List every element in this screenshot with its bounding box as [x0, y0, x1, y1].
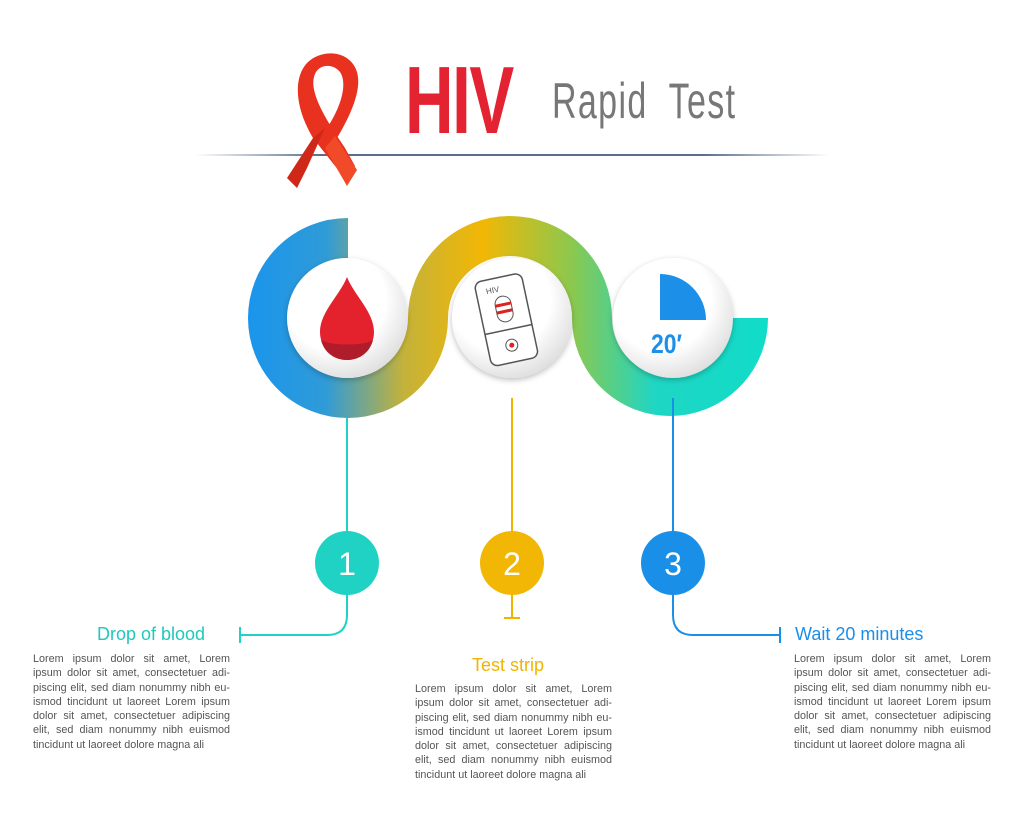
text block 1: dolor sit amet, consectetuer adipiscing — [33, 710, 230, 722]
icon: timer circle 20': 20′ — [651, 329, 682, 359]
step 2 badge: 2 — [503, 546, 521, 582]
text block 1: tincidunt ut laoreet dolore magna ali — [33, 739, 204, 751]
wave band — [268, 236, 748, 398]
text block 2: ismod tincidunt ut laoreet Lorem ipsum — [415, 726, 612, 738]
text block 1: piscing elit, sed diam nonummy nibh eu- — [33, 682, 230, 694]
title: HIV: HIV — [405, 47, 513, 154]
text block 2: tincidunt ut laoreet dolore magna ali — [415, 769, 586, 781]
icon: test strip circle: HIV — [485, 285, 501, 296]
step 1 badge: 1 — [338, 546, 356, 582]
icon: red ribbon — [287, 53, 358, 188]
heading: Test strip: Test strip — [472, 655, 544, 675]
connector 3 — [673, 398, 780, 643]
text block 1: ismod tincidunt ut laoreet Lorem ipsum — [33, 696, 230, 708]
text block 1: Lorem ipsum dolor sit amet, Lorem — [33, 653, 230, 665]
step 3 badge — [641, 531, 705, 595]
connector 2 — [504, 398, 520, 618]
step 1 badge — [315, 531, 379, 595]
connector 1 — [240, 418, 347, 643]
heading: Wait 20 minutes: Wait 20 minutes — [795, 624, 923, 644]
icon: blood drop circle — [287, 258, 407, 378]
icon: timer circle 20' — [613, 258, 733, 378]
step 3 badge: 3 — [664, 546, 682, 582]
text block 1: ipsum dolor sit amet, consectetuer adi- — [33, 667, 230, 679]
text block 2: dolor sit amet, consectetuer adipiscing — [415, 740, 612, 752]
text block 2: ipsum dolor sit amet, consectetuer adi- — [415, 697, 612, 709]
text block 2: elit, sed diam nonummy nibh euismod — [415, 754, 612, 766]
text block 3: tincidunt ut laoreet dolore magna ali — [794, 739, 965, 751]
text block 2: piscing elit, sed diam nonummy nibh eu- — [415, 712, 612, 724]
text block 3: Lorem ipsum dolor sit amet, Lorem — [794, 653, 991, 665]
text block 3: dolor sit amet, consectetuer adipiscing — [794, 710, 991, 722]
text block 3: piscing elit, sed diam nonummy nibh eu- — [794, 682, 991, 694]
text block 1 — [33, 653, 230, 751]
step 2 badge — [480, 531, 544, 595]
text block 3: elit, sed diam nonummy nibh euismod — [794, 724, 991, 736]
text block 3: ismod tincidunt ut laoreet Lorem ipsum — [794, 696, 991, 708]
title underline — [195, 154, 830, 156]
text block 3 — [794, 653, 991, 751]
text block 2 — [415, 683, 612, 781]
text block 1: elit, sed diam nonummy nibh euismod — [33, 724, 230, 736]
heading: Drop of blood: Drop of blood — [97, 624, 205, 644]
text block 3: ipsum dolor sit amet, consectetuer adi- — [794, 667, 991, 679]
text block 2: Lorem ipsum dolor sit amet, Lorem — [415, 683, 612, 695]
subtitle: Rapid Test: Rapid Test — [552, 73, 736, 129]
icon: test strip circle — [452, 258, 572, 378]
